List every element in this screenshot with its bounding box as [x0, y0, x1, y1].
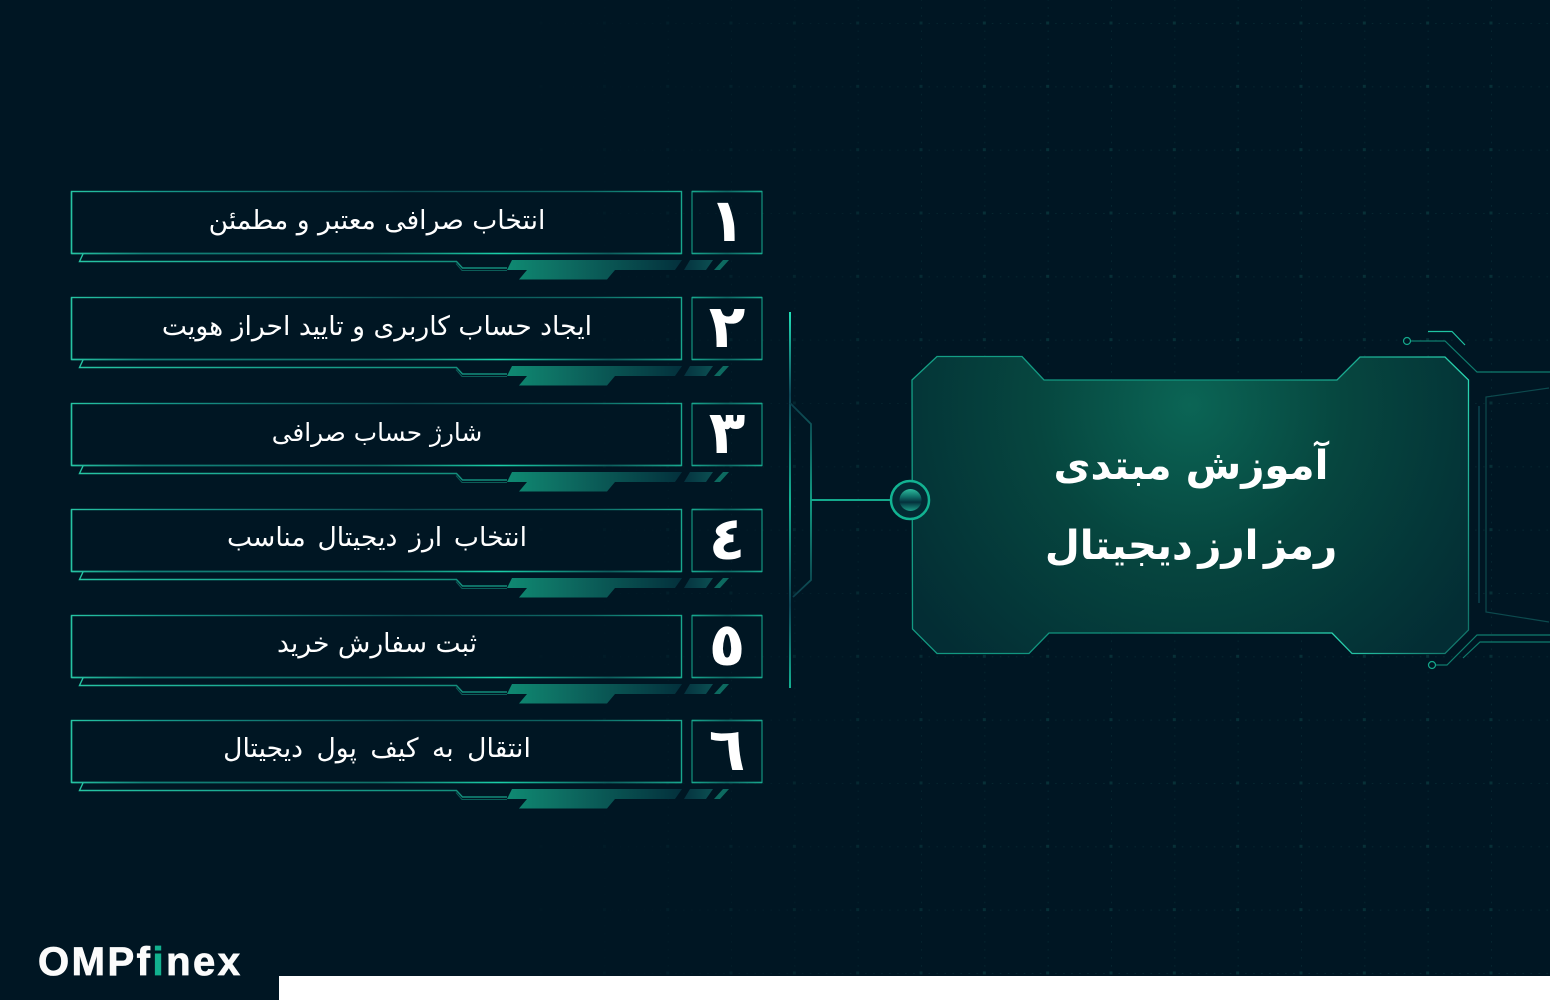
step 1 label: انتخاب صرافی معتبر و مطمئن: [209, 205, 545, 236]
step 6 number: ٦: [709, 715, 745, 785]
step 1 row: [72, 186, 762, 280]
panel title: آموزش مبتدی: [1054, 440, 1330, 489]
step 4 label: انتخاب ارز دیجیتال مناسب: [227, 522, 527, 553]
panel title: رمز ارز دیجیتال: [1045, 522, 1337, 569]
connector node: [891, 481, 929, 519]
panel title: [1045, 440, 1337, 569]
step 3 number: ٣: [709, 398, 745, 468]
circuit lines right: [1404, 332, 1550, 668]
step 6 row: [72, 715, 762, 808]
step 5 row: [72, 610, 762, 704]
step 5 label: ثبت سفارش خرید: [277, 628, 477, 659]
step 5 number: ٥: [709, 610, 745, 680]
step 4 row: [72, 504, 762, 598]
step 2 label: ایجاد حساب کاربری و تایید احراز هویت: [162, 311, 592, 342]
step 3 label: شارژ حساب صرافی: [272, 418, 482, 447]
bottom white strip: [279, 976, 1550, 1000]
step 4 number: ٤: [709, 504, 745, 574]
step 6 label: انتقال به کیف پول دیجیتال: [223, 733, 531, 764]
step 2 number: ٢: [709, 292, 745, 362]
step 2 row: [72, 292, 762, 386]
step 1 number: ١: [709, 186, 745, 256]
step 3 row: [72, 398, 762, 492]
logo: OMPfinex: [38, 940, 240, 984]
connector bracket: [790, 312, 890, 688]
title panel: [912, 356, 1468, 654]
